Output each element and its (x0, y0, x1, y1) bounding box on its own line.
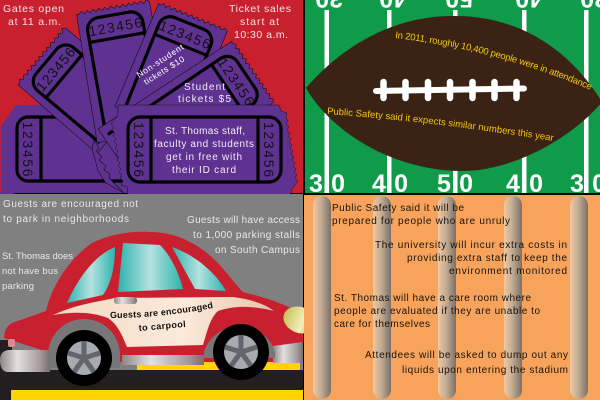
label: gates open: at 11 a.m. (8, 16, 61, 28)
text: care room (334, 293, 540, 330)
car (0, 232, 304, 386)
text: unruly: Public Safety said it will be (332, 203, 464, 214)
ticket: bottom right: 123456 (261, 122, 277, 177)
ticket: bottom right (111, 105, 298, 195)
front wheel (204, 324, 275, 380)
label: staff free entry: St. Thomas staff, (165, 126, 245, 137)
rear wheel (48, 319, 120, 386)
goal post bars (313, 196, 588, 399)
panel: football field (305, 0, 600, 198)
text: extra costs (375, 240, 567, 277)
label: staff free entry: faculty and students (154, 139, 254, 150)
label: non-student tickets: Non-student (135, 42, 186, 80)
label: gates open (3, 3, 64, 28)
ticket: fan 3 (115, 1, 228, 135)
ticket: bottom right: 123456 (131, 122, 147, 177)
text: care room: St. Thomas will have a care room where (334, 293, 531, 304)
label: parking stalls: on South Campus (215, 245, 300, 256)
text: care room: people are evaluated if they are unable to (334, 306, 540, 317)
bottom yard numbers (309, 170, 600, 198)
label: bus parking: parking (2, 281, 34, 292)
text: extra costs: environment monitored (449, 266, 567, 277)
ticket: bottom left: 123456 (20, 122, 36, 177)
label: bus parking (2, 251, 73, 292)
label: student tickets: tickets $5 (178, 94, 231, 105)
label: student tickets: Student (184, 82, 225, 93)
ticket: fan 3: 123456 (157, 17, 213, 52)
label: staff free entry (154, 126, 254, 176)
text: extra costs: The university will incur extra costs in (375, 240, 567, 251)
label: ticket sales (229, 3, 291, 41)
label: parking stalls (187, 215, 300, 256)
label: bus parking: not have bus (2, 266, 58, 277)
torn ticket edge (92, 140, 124, 193)
door panel (53, 297, 274, 347)
label: student tickets (178, 82, 231, 105)
ticket: fan 2: 123456 (87, 14, 143, 39)
text: unruly: prepared for people who are unruly (332, 216, 510, 227)
windows (67, 243, 226, 303)
label: parking stalls: to 1,000 parking stalls (193, 230, 300, 241)
bumpers (0, 350, 50, 372)
text: unruly (332, 203, 510, 227)
ticket: fan 4 (98, 38, 275, 192)
text: liquids (365, 350, 568, 376)
tail light (8, 339, 15, 347)
carpool text (110, 302, 213, 333)
ticket: fan 4: 123456 (215, 55, 258, 109)
door handle (114, 297, 137, 304)
text: care room: care for themselves (334, 319, 430, 330)
text: liquids: Attendees will be asked to dump out any (365, 350, 568, 361)
label: gates open: Gates open (3, 3, 64, 15)
top yard numbers (315, 0, 600, 12)
football (306, 16, 600, 171)
bottom yard numbers: 40 (506, 170, 543, 198)
carpool text: to carpool (138, 319, 186, 333)
label: non-student tickets: tickets $10 (142, 54, 186, 87)
panel: parking (0, 194, 304, 400)
football laces (376, 82, 524, 98)
label: ticket sales: 10:30 a.m. (234, 29, 288, 41)
ticket: fan 1: 123456 (33, 44, 79, 94)
text: liquids: liquids upon entering the stadium (402, 365, 568, 376)
label: bus parking: St. Thomas does (2, 251, 73, 262)
label: neighborhoods: Guests are encouraged not (3, 199, 138, 210)
carpool text: Guests are encouraged (110, 302, 213, 318)
road (0, 340, 303, 400)
text: extra costs: providing extra staff to keep the (407, 253, 567, 264)
public safety expectation text: Public Safety said it expects similar numbers this year (328, 108, 554, 141)
label: neighborhoods (3, 199, 138, 225)
bottom yard numbers: 50 (437, 170, 473, 198)
label: ticket sales: start at (240, 16, 279, 28)
ticket: fan 2 (74, 0, 172, 143)
label: staff free entry: get in free with (166, 152, 242, 163)
label: staff free entry: their ID card (172, 165, 236, 176)
bottom yard numbers: 30 (309, 170, 345, 198)
ticket: bottom left (0, 105, 135, 197)
bottom yard numbers: 40 (372, 170, 408, 198)
label: parking stalls: Guests will have access (187, 215, 300, 226)
panel: tickets (0, 0, 303, 197)
panel: safety (304, 195, 600, 400)
attendance text: In 2011, roughly 10,400 people were in attendance (396, 32, 592, 90)
label: ticket sales: Ticket sales (229, 3, 291, 15)
headlight (280, 302, 320, 338)
ticket: fan 1 (15, 27, 146, 154)
label: neighborhoods: to park in neighborhoods (3, 214, 129, 225)
yard lines (324, 10, 588, 193)
